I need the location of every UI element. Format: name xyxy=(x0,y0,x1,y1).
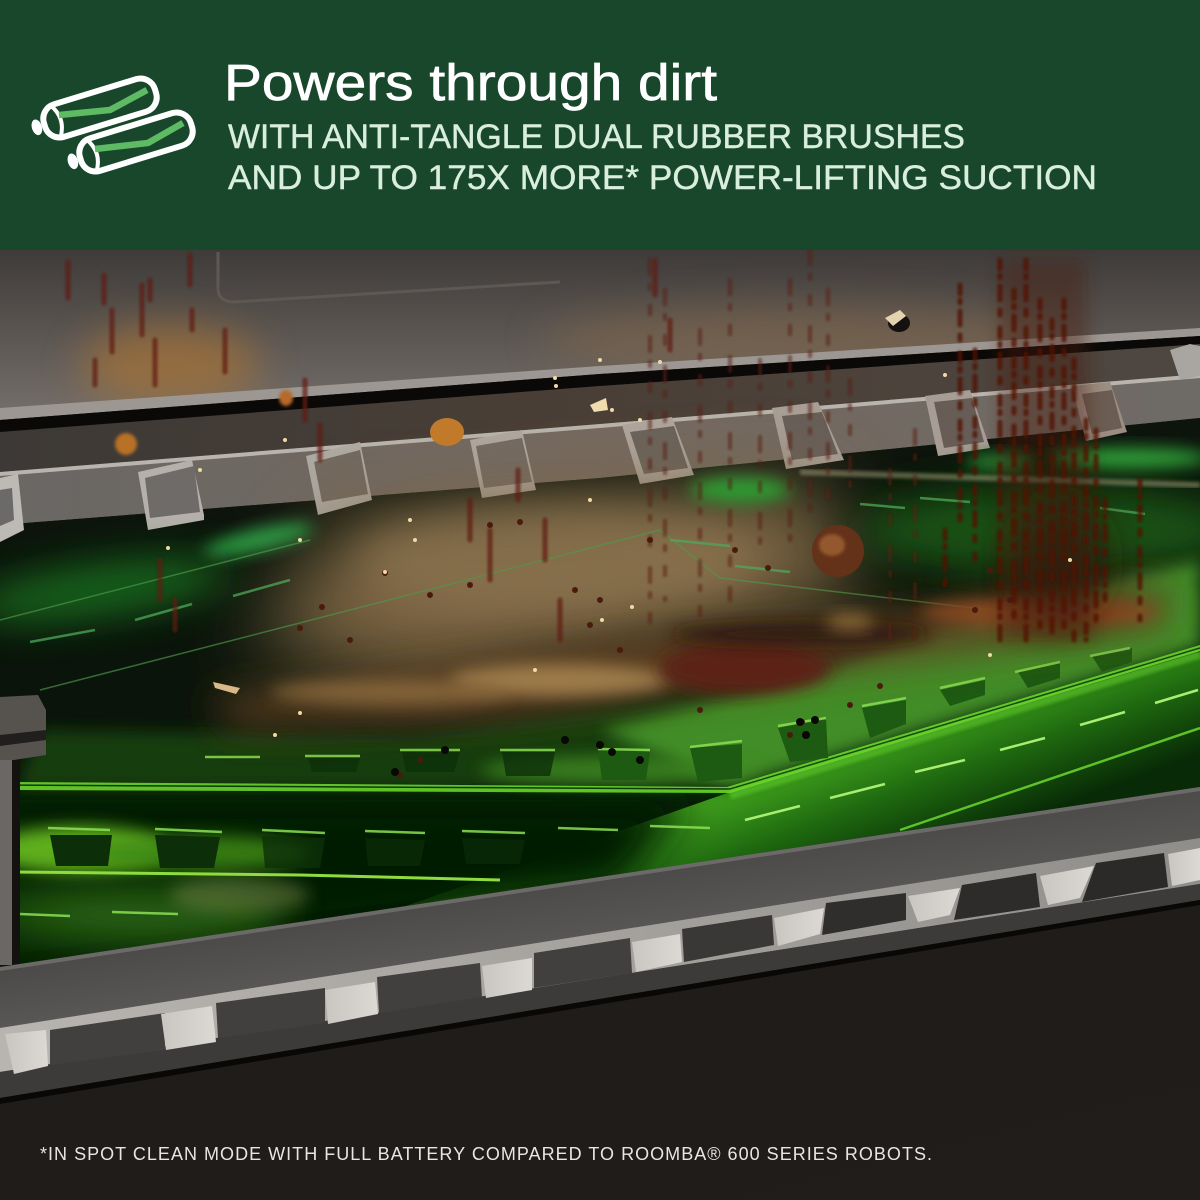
product scene: brushes and dirt xyxy=(0,250,1200,1200)
upper rail with tabs xyxy=(0,328,1200,548)
subtitle xyxy=(228,118,1097,197)
dirt cloud xyxy=(210,260,1165,726)
lower green brush xyxy=(0,560,1200,975)
header band xyxy=(0,0,1200,251)
left clip xyxy=(0,695,46,965)
front bar xyxy=(0,787,1200,1104)
dirt specks xyxy=(168,360,1070,775)
title: Powers through dirt xyxy=(224,54,717,111)
icon: two batteries xyxy=(27,75,196,179)
footnote: *IN SPOT CLEAN MODE WITH FULL BATTERY COMPARED TO ROOMBA® 600 SERIES ROBOTS. xyxy=(40,1144,932,1164)
rail tabs xyxy=(0,344,1200,542)
upper brush haze xyxy=(0,448,1200,690)
dirt streaks xyxy=(68,250,1140,640)
subtitle: AND UP TO 175X MORE* POWER-LIFTING SUCTION xyxy=(228,159,1097,197)
bar windows xyxy=(50,853,1168,1065)
floor shadow xyxy=(0,905,1200,1200)
bar tabs xyxy=(5,848,1200,1074)
large dirt chunks xyxy=(115,310,910,694)
subtitle: WITH ANTI-TANGLE DUAL RUBBER BRUSHES xyxy=(228,118,965,156)
upper housing panel xyxy=(0,250,1200,412)
brush blocks xyxy=(50,752,555,868)
